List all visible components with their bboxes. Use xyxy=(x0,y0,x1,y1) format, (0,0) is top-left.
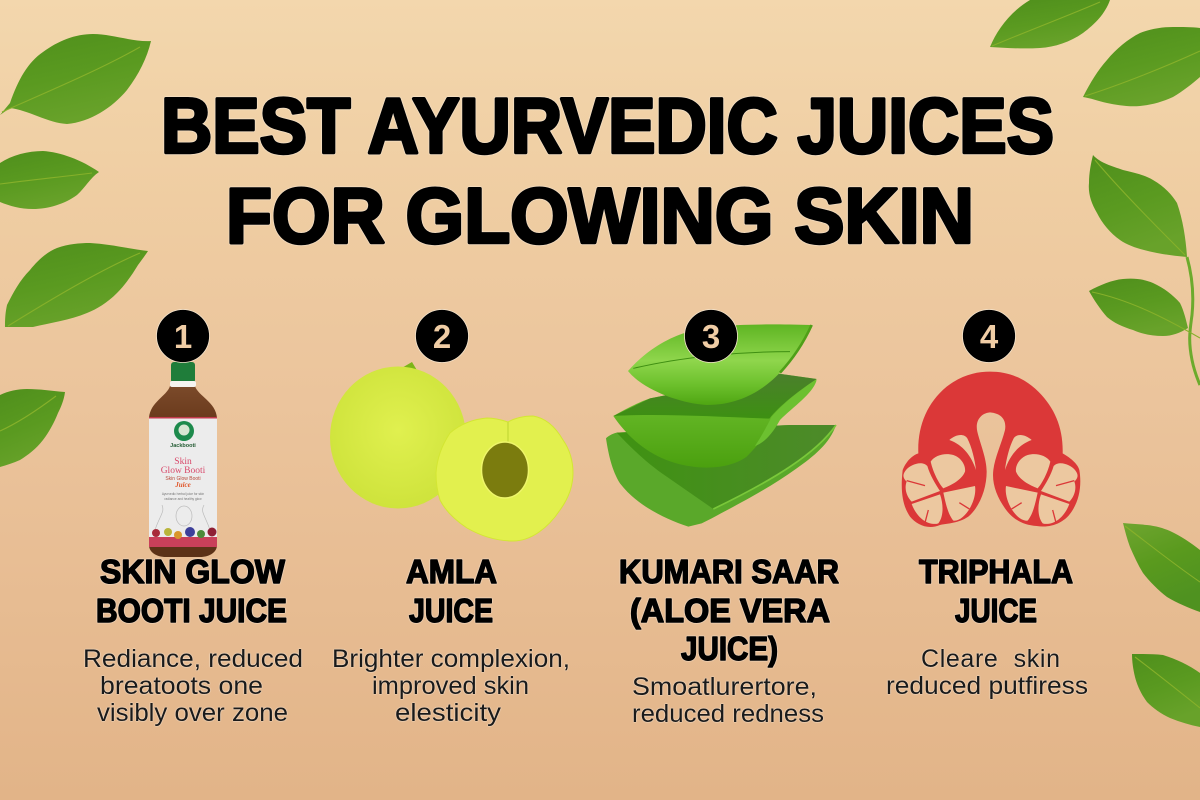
heading: Kumari Saar: KUMARI SAAR xyxy=(619,553,839,590)
product image: Skin Glow Booti bottle: Skin xyxy=(174,457,192,467)
text: Kumari Saar benefits: Smoatlurertore, xyxy=(632,673,817,701)
leaf: left 2 xyxy=(0,151,99,209)
heading: Skin Glow Booti Juice: SKIN GLOW xyxy=(100,553,286,590)
heading: Skin Glow Booti Juice: BOOTI JUICE xyxy=(96,592,287,629)
badge 4: 4 xyxy=(980,318,999,355)
leaf: right 5 xyxy=(1123,523,1200,612)
product image: Skin Glow Booti bottle: Skin Glow Booti xyxy=(165,476,201,482)
heading: Kumari Saar xyxy=(619,553,839,667)
text: Skin Glow Booti benefits: Rediance, reduced xyxy=(83,645,303,673)
heading: Skin Glow Booti Juice xyxy=(96,553,287,629)
product image: triphala red emblem xyxy=(902,372,1080,527)
text: Amla benefits: improved skin xyxy=(372,672,529,700)
heading: Kumari Saar: JUICE) xyxy=(681,630,778,667)
badge 3: 3 xyxy=(702,318,720,355)
heading: Kumari Saar: (ALOE VERA xyxy=(630,592,830,629)
text: Triphala benefits xyxy=(886,645,1088,700)
badge 4 xyxy=(962,310,1016,362)
leaf: right 2 xyxy=(1083,27,1200,106)
leaf: right 3 with stem xyxy=(1089,155,1200,385)
badge 1: 1 xyxy=(174,318,192,355)
leaf: left 3 xyxy=(5,243,148,327)
heading: Amla Juice: AMLA xyxy=(406,553,497,590)
product image: Skin Glow Booti bottle xyxy=(149,362,217,557)
title: BEST AYURVEDIC JUICES xyxy=(161,82,1054,170)
product image: aloe vera slices xyxy=(606,324,836,527)
text: Amla benefits: elesticity xyxy=(395,699,502,727)
text: Kumari Saar benefits xyxy=(632,673,824,728)
product image: amla fruits xyxy=(330,362,573,541)
text: Skin Glow Booti benefits: breatoots one xyxy=(100,672,263,700)
leaf: top right xyxy=(990,0,1110,48)
text: Amla benefits: Brighter complexion, xyxy=(332,645,570,673)
text: Kumari Saar benefits: reduced redness xyxy=(632,700,824,728)
text: Amla benefits xyxy=(332,645,570,727)
product image: Skin Glow Booti bottle: Juice xyxy=(174,481,191,489)
badge 2 xyxy=(416,310,468,362)
product image: Skin Glow Booti bottle: radiance and healthy glow xyxy=(164,497,202,501)
leaf: left 1 xyxy=(0,34,151,124)
heading: Amla Juice xyxy=(406,553,497,629)
text: Skin Glow Booti benefits: visibly over zone xyxy=(97,699,288,727)
product image: Skin Glow Booti bottle: Glow Booti xyxy=(161,466,206,476)
leaf: right 4 xyxy=(1089,279,1200,338)
text: Triphala benefits: reduced putfiress xyxy=(886,672,1088,700)
text: Skin Glow Booti benefits xyxy=(83,645,303,727)
text: Triphala benefits: Cleare skin xyxy=(921,645,1060,673)
leaf: left 4 xyxy=(0,389,65,467)
badge 3 xyxy=(684,310,738,362)
leaf: right 6 xyxy=(1132,654,1200,727)
heading: Triphala Juice: TRIPHALA xyxy=(919,553,1073,590)
product image: Skin Glow Booti bottle: Jackbooti xyxy=(170,443,196,449)
badge 2: 2 xyxy=(433,318,451,355)
heading: Triphala Juice: JUICE xyxy=(955,592,1037,629)
badge 1 xyxy=(156,310,210,362)
heading: Amla Juice: JUICE xyxy=(409,592,493,629)
title: FOR GLOWING SKIN xyxy=(226,172,974,260)
heading: Triphala Juice xyxy=(919,553,1073,629)
title xyxy=(161,82,1054,260)
product image: Skin Glow Booti bottle: Ayurvedic herbal juice for skin xyxy=(162,492,204,496)
